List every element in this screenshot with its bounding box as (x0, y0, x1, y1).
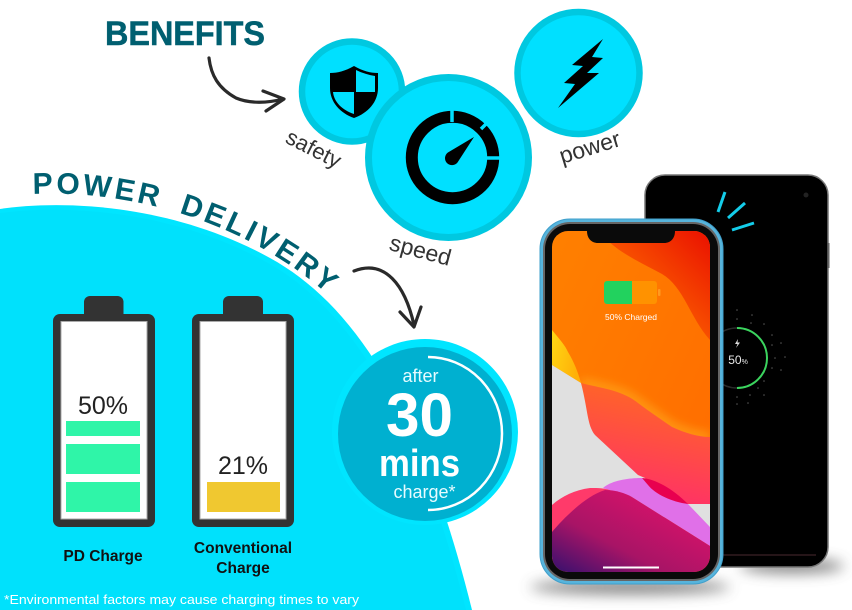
badge: after 30 mins charge: charge* (393, 482, 456, 502)
cyan background shape (0, 205, 472, 610)
heading: power delivery: POWER DELIVERY (34, 173, 340, 289)
label: PD charge: PD Charge (63, 548, 143, 565)
value: 21%: 21% (218, 452, 268, 480)
wallpaper (552, 231, 710, 572)
heading: benefits: BENEFITS (105, 15, 265, 53)
label: conventional charge: Conventional (194, 540, 292, 557)
icon: speedometer (412, 108, 503, 198)
icon: cyan spark ticks (718, 192, 754, 230)
arrow: power delivery to timer (354, 268, 421, 327)
benefit: speed (368, 78, 528, 271)
arrow: benefits to safety (209, 58, 284, 111)
label: speed: speed (387, 229, 454, 271)
green charge bars (66, 421, 140, 512)
battery: conventional charge (192, 296, 294, 577)
yellow charge bar (207, 482, 280, 512)
phone: front iphone (540, 219, 723, 584)
phone: back android (645, 175, 830, 567)
icon: shield (330, 66, 378, 118)
benefit: safety (282, 42, 402, 173)
badge: after 30 mins charge: 30 (386, 381, 453, 449)
footnote: *Environmental factors may cause charging times to vary (4, 592, 359, 607)
badge: after 30 mins charge: mins (379, 443, 460, 485)
benefit: power (518, 12, 640, 169)
badge: after 30 mins charge: after (402, 366, 439, 386)
charge ring 50% (707, 309, 786, 405)
label: safety: safety (282, 124, 346, 173)
phone shadows (530, 559, 844, 594)
charge ring 50%: 50% (728, 353, 748, 367)
label: power: power (556, 125, 624, 169)
label: conventional charge: Charge (216, 560, 270, 577)
badge: after 30 mins charge (332, 339, 518, 525)
home bar (603, 566, 659, 568)
icon: lightning bolt (558, 39, 603, 108)
battery indicator (604, 281, 660, 304)
value: 50%: 50% (78, 392, 128, 420)
notch (587, 231, 675, 243)
label: 50% charged: 50% Charged (605, 312, 657, 322)
battery: PD charge (53, 296, 155, 565)
